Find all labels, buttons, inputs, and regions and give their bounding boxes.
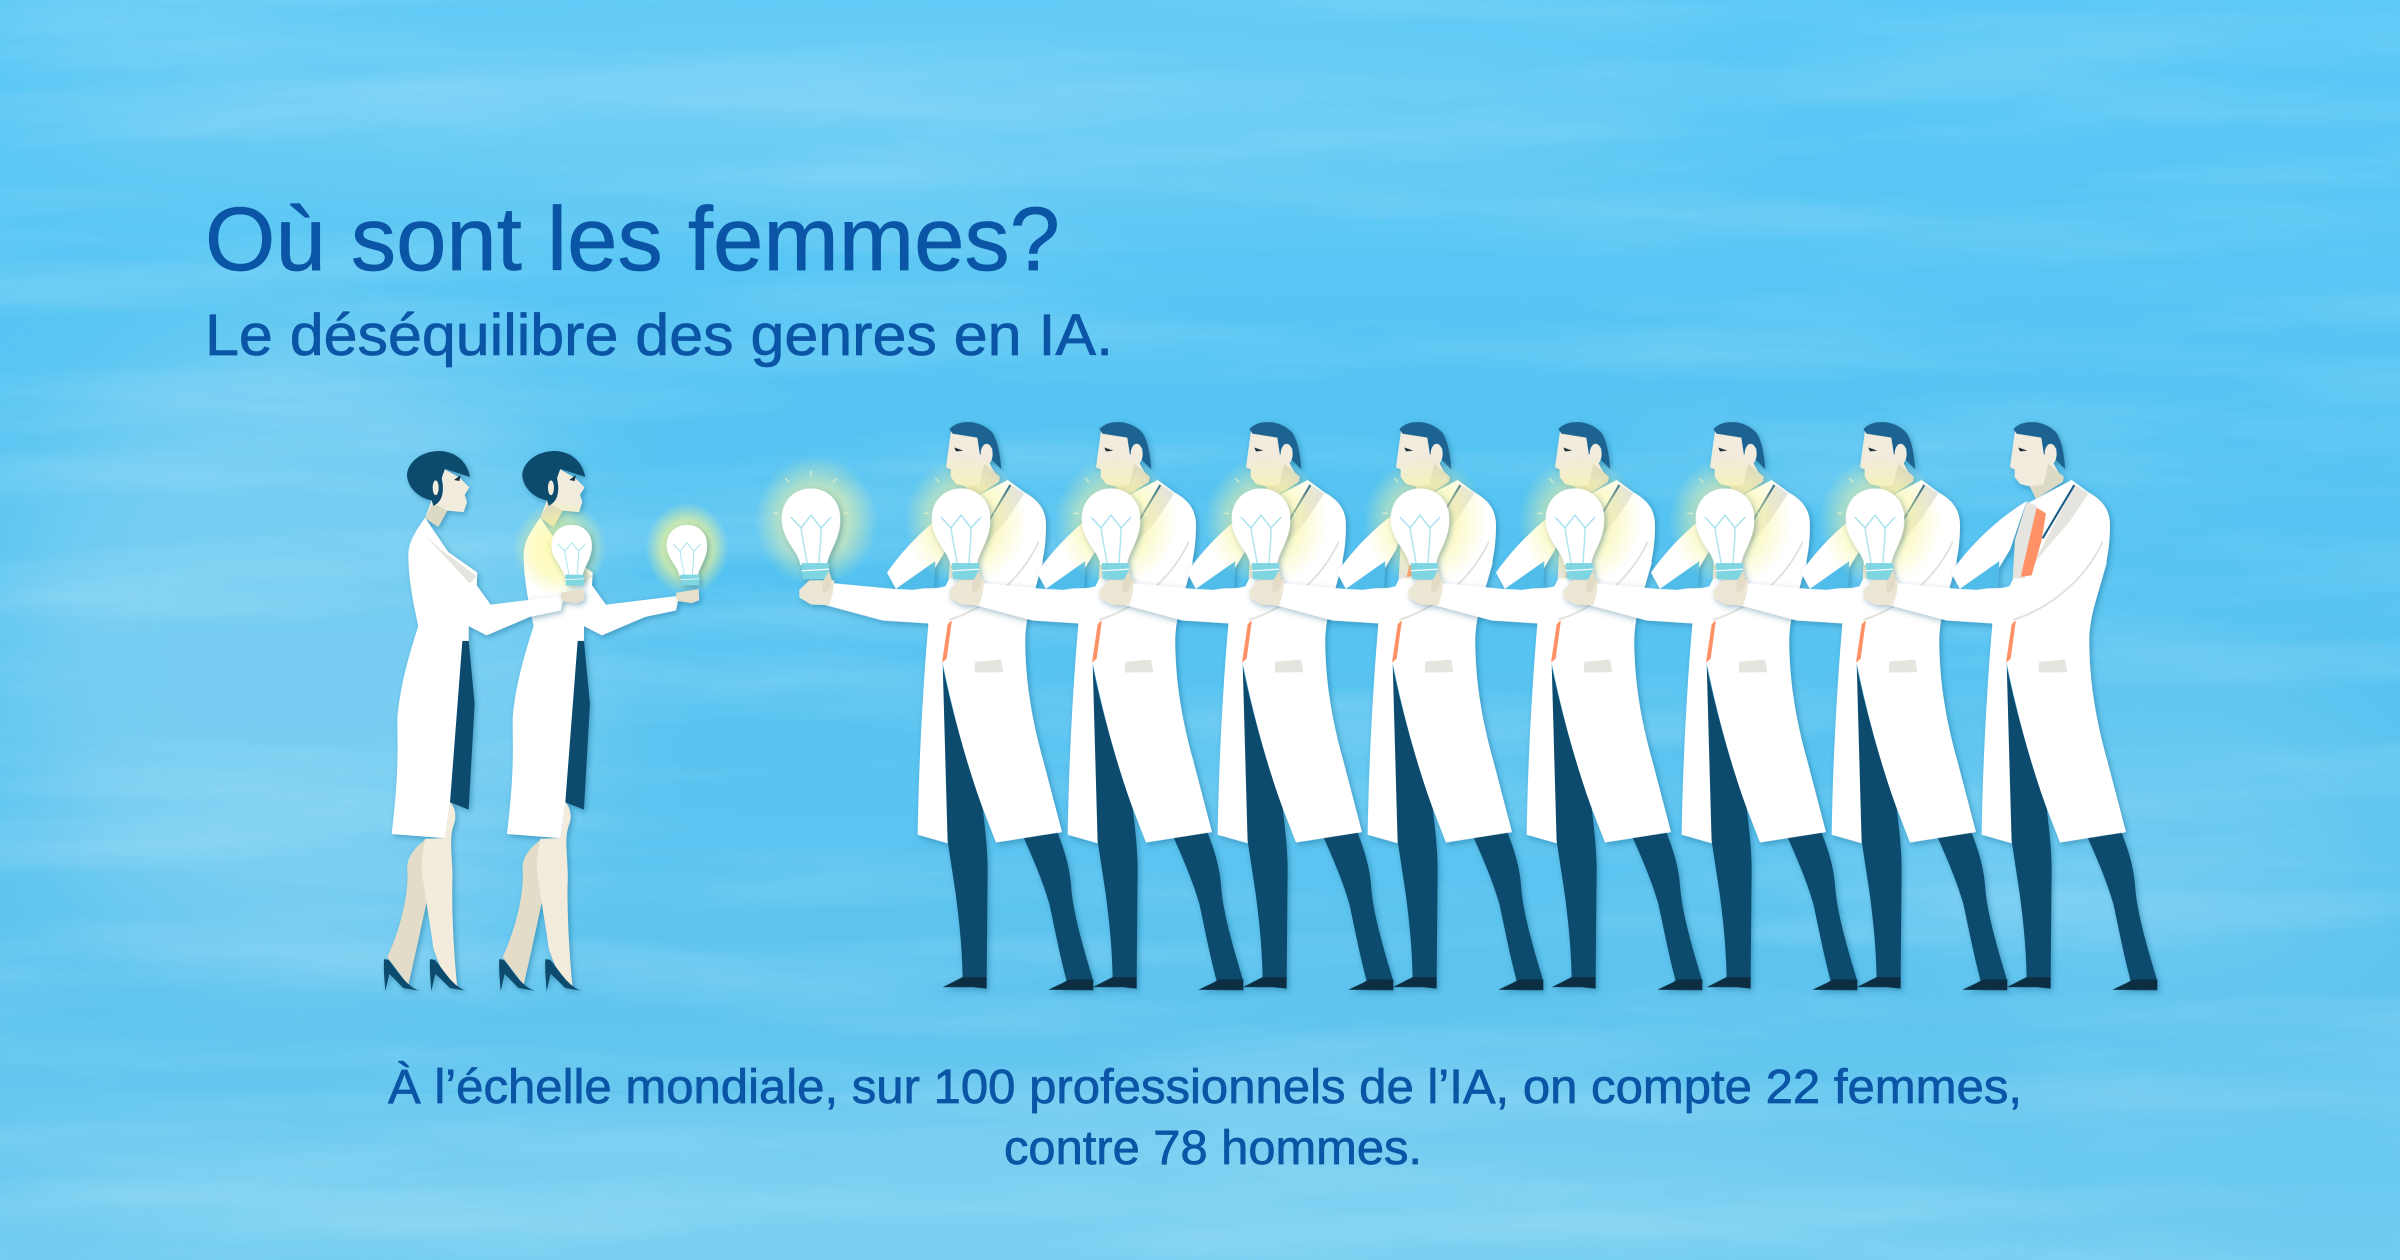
man 3 <box>1054 422 1393 990</box>
man 1 <box>754 422 1093 990</box>
caption text <box>388 1061 2022 1175</box>
men group: row of 8 scientists with bulbs <box>754 422 2157 990</box>
women group: 2 of 100 scaled <box>384 451 729 991</box>
subtitle: Le déséquilibre des genres en IA. <box>205 303 1113 368</box>
man 8 <box>1818 422 2157 990</box>
man 4 <box>1204 422 1543 990</box>
man 7 <box>1668 422 2007 990</box>
caption text: contre 78 hommes. <box>1004 1122 1422 1175</box>
woman 2 with light bulb <box>499 451 729 991</box>
title: Où sont les femmes? <box>205 190 1060 290</box>
man 2 <box>904 422 1243 990</box>
man 6 <box>1518 422 1857 990</box>
man 5 <box>1363 422 1702 990</box>
caption text: À l’échelle mondiale, sur 100 professionnels de l’IA, on compte 22 femmes, <box>388 1061 2022 1114</box>
woman 1 with light bulb <box>384 451 607 991</box>
